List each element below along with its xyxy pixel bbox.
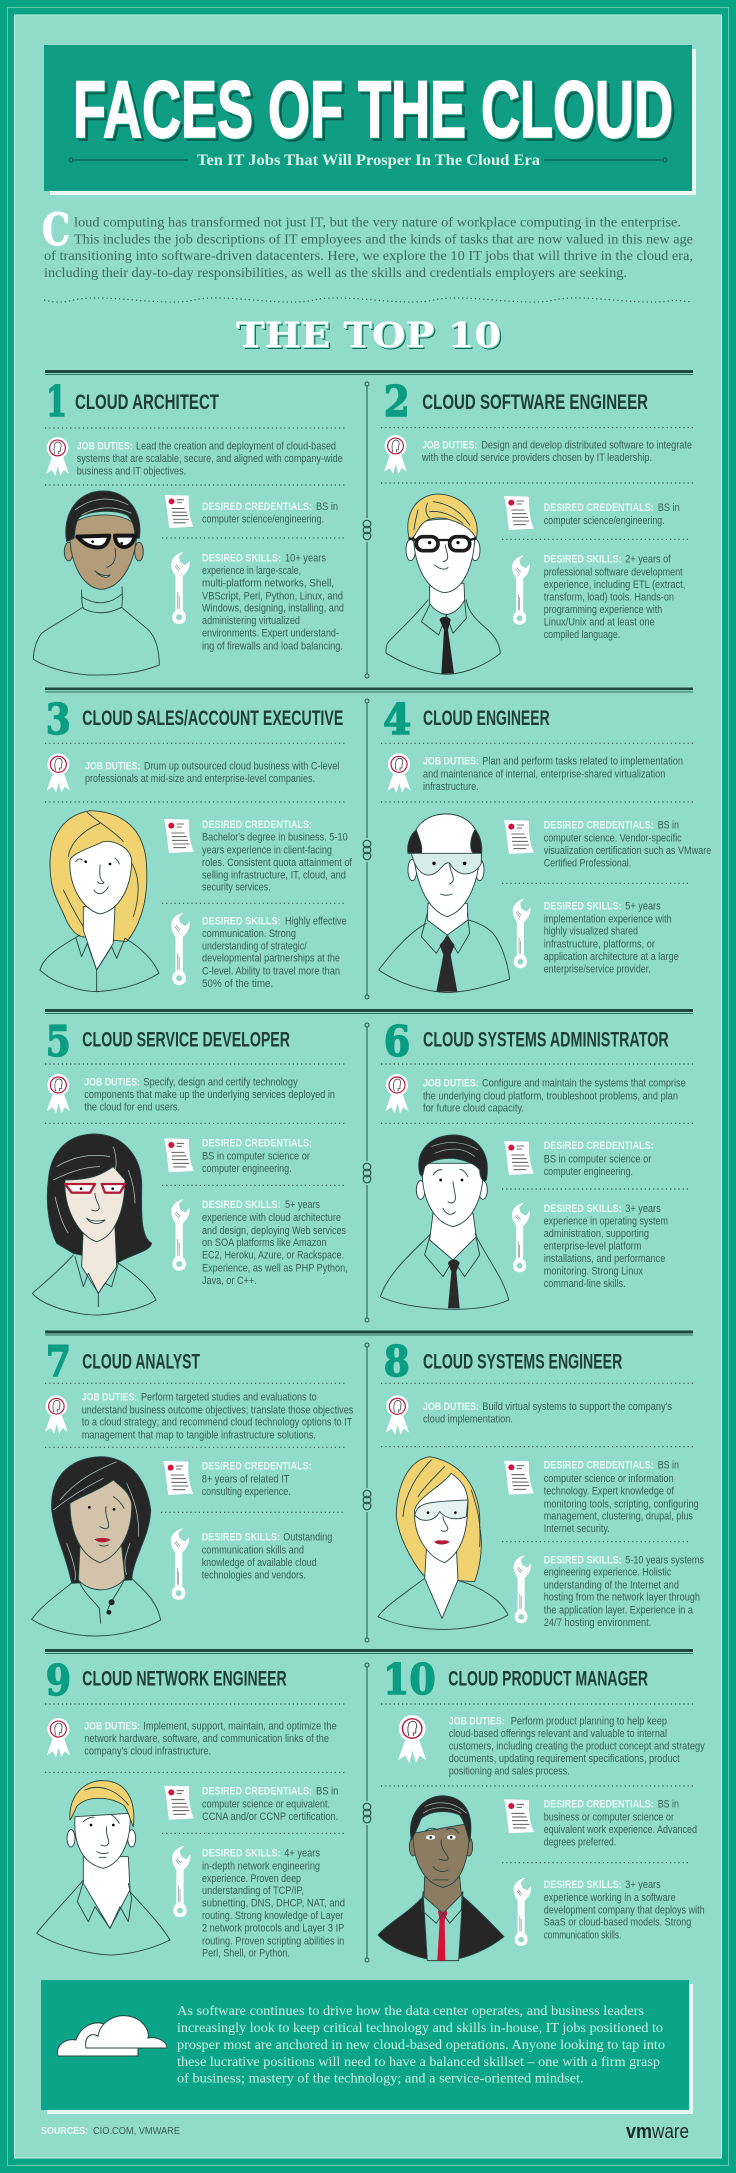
desired skills: [202, 1848, 345, 1960]
panel 1: cloud architect: [33, 377, 347, 675]
job duties: [82, 1392, 353, 1441]
desired credentials: computer science/engineering.: [202, 514, 324, 526]
icon: wrench: [512, 1203, 530, 1272]
icon: wrench: [171, 913, 190, 985]
desired credentials: computer engineering.: [202, 1163, 292, 1175]
desired skills: [202, 915, 347, 990]
desired credentials: BS in computer science or: [202, 1151, 310, 1163]
desired skills: ing of firewalls and load balancing.: [202, 640, 343, 652]
desired skills: development company that deploys with: [544, 1904, 705, 1916]
desired skills: 5+ years: [285, 1199, 320, 1211]
job title: CLOUD SYSTEMS ENGINEER: [423, 1350, 622, 1373]
job duties: Plan and perform tasks related to implementation: [482, 756, 683, 768]
desired skills: enterprise-level platform: [544, 1241, 641, 1253]
desired skills: installations, and performance: [544, 1253, 665, 1265]
portrait: [379, 814, 510, 993]
desired skills: routing. Proven scripting abilities in: [202, 1935, 344, 1947]
desired skills: 5+ years: [625, 901, 661, 913]
desired credentials: DESIRED CREDENTIALS:: [202, 819, 312, 831]
desired credentials: DESIRED CREDENTIALS:: [544, 820, 654, 832]
conclusion text: increasingly look to keep critical technology and skills in-house, IT jobs positioned to: [177, 2021, 663, 2036]
icon: wrench: [172, 1846, 191, 1917]
desired skills: DESIRED SKILLS:: [202, 1532, 280, 1544]
portrait: [386, 494, 500, 674]
desired credentials: Certified Professional.: [544, 858, 631, 870]
conclusion text: these lucrative positions will need to have a balanced skillset – one with a firm grasp: [177, 2055, 660, 2070]
number 7: 7: [46, 1337, 71, 1386]
desired credentials: roles. Consistent quota attainment of: [202, 857, 352, 869]
job duties: infrastructure.: [423, 781, 479, 793]
desired skills: the application layer. Experience in a: [544, 1604, 693, 1616]
job duties: JOB DUTIES:: [423, 1078, 479, 1090]
desired skills: administering virtualized: [202, 615, 300, 627]
icon: credentials document: [504, 496, 534, 530]
desired credentials: visualization certification such as VMware: [544, 845, 711, 857]
icon: ribbon: [384, 435, 407, 474]
job title: CLOUD ANALYST: [82, 1350, 200, 1373]
number 1: 1: [46, 377, 67, 426]
vmware logo: ware: [651, 2121, 689, 2143]
desired credentials: computer science/engineering.: [544, 515, 665, 527]
intro text: [42, 205, 693, 281]
job duties: for future cloud capacity.: [423, 1103, 524, 1115]
conclusion text: of business; mastery of the technology; and a service-oriented mindset.: [177, 2072, 584, 2087]
job title: CLOUD SOFTWARE ENGINEER: [422, 391, 648, 414]
job duties: understand business outcome objectives; translate those objectives: [82, 1404, 353, 1416]
vmware logo: [626, 2121, 689, 2143]
desired skills: programming experience with: [544, 604, 662, 616]
job duties: [84, 1720, 337, 1757]
desired skills: [202, 1199, 348, 1287]
desired skills: [202, 553, 344, 652]
desired skills: Experience, as well as PHP Python,: [202, 1263, 348, 1275]
desired credentials: computer science or information: [544, 1473, 674, 1485]
desired skills: DESIRED SKILLS:: [544, 1203, 622, 1215]
icon: ribbon: [47, 1074, 70, 1113]
sources: [41, 2126, 180, 2137]
number 4: 4: [383, 695, 411, 744]
desired credentials: DESIRED CREDENTIALS:: [544, 1140, 654, 1152]
desired skills: EC2, Heroku, Azure, or Rackspace.: [202, 1250, 344, 1262]
sources: CIO.COM, VMWARE: [93, 2126, 180, 2137]
job duties: documents, updating requirement specifications, product: [449, 1753, 680, 1765]
job duties: [423, 1401, 672, 1426]
desired skills: in-depth network engineering: [202, 1860, 320, 1872]
job duties: [77, 440, 343, 477]
job duties: company's cloud infrastructure.: [84, 1745, 211, 1757]
desired skills: experience, including ETL (extract,: [544, 579, 685, 591]
icon: ribbon: [47, 1718, 70, 1757]
desired credentials: [544, 1460, 699, 1535]
icon: clouds: [57, 2016, 167, 2056]
desired skills: DESIRED SKILLS:: [544, 901, 622, 913]
desired skills: DESIRED SKILLS:: [544, 554, 622, 566]
desired credentials: DESIRED CREDENTIALS:: [544, 1460, 654, 1472]
desired skills: 50% of the time.: [202, 978, 273, 990]
portrait: [32, 1134, 156, 1315]
job duties: Build virtual systems to support the company's: [482, 1401, 672, 1413]
desired skills: developmental partnerships at the: [202, 953, 340, 965]
desired skills: application architecture at a large: [544, 951, 679, 963]
desired credentials: management, clustering, drupal, plus: [544, 1511, 693, 1523]
desired credentials: BS in: [658, 1798, 679, 1810]
icon: credentials document: [164, 1786, 194, 1820]
desired skills: subnetting, DNS, DHCP, NAT, and: [202, 1898, 345, 1910]
job duties: JOB DUTIES:: [423, 1401, 479, 1413]
desired skills: implementation experience with: [544, 913, 672, 925]
desired credentials: consulting experience.: [202, 1486, 291, 1498]
job duties: [421, 440, 692, 464]
portrait: [378, 1457, 508, 1629]
desired credentials: BS in: [658, 502, 680, 514]
desired skills: experience with cloud architecture: [202, 1212, 341, 1224]
job duties: [423, 756, 683, 793]
portrait: [40, 811, 159, 992]
icon: wrench: [513, 899, 531, 968]
job title: CLOUD ENGINEER: [423, 707, 550, 730]
job duties: JOB DUTIES:: [422, 440, 477, 452]
icon: wrench: [514, 1555, 531, 1623]
job duties: JOB DUTIES:: [84, 1720, 140, 1732]
portrait: [380, 1135, 509, 1309]
desired credentials: BS in: [658, 1460, 679, 1472]
desired skills: 3+ years: [625, 1879, 661, 1891]
desired skills: experience in large-scale,: [202, 565, 301, 577]
desired skills: multi-platform networks, Shell,: [202, 578, 334, 590]
icon: credentials document: [504, 1141, 534, 1175]
desired skills: on SOA platforms like Amazon: [202, 1237, 327, 1249]
desired skills: and design, deploying Web services: [202, 1225, 346, 1237]
desired credentials: BS in: [316, 501, 338, 513]
desired skills: 5-10 years systems: [625, 1554, 704, 1566]
desired skills: monitoring. Strong Linux: [544, 1265, 644, 1277]
subtitle: Ten IT Jobs That Will Prosper In The Cloud Era: [197, 152, 540, 169]
desired skills: infrastructure, platforms, or: [544, 938, 655, 950]
job duties: Configure and maintain the systems that comprise: [482, 1078, 686, 1090]
job duties: components that make up the underlying services deployed in: [84, 1089, 335, 1101]
desired credentials: equivalent work experience. Advanced: [544, 1824, 697, 1836]
desired skills: transform, load) tools. Hands-on: [544, 591, 674, 603]
desired skills: communication. Strong: [202, 928, 296, 940]
job duties: Implement, support, maintain, and optimize the: [143, 1720, 337, 1732]
desired skills: engineering experience. Holistic: [544, 1567, 672, 1579]
column dividers: [363, 382, 371, 1962]
desired skills: Outstanding: [283, 1532, 332, 1544]
desired skills: professional software development: [544, 566, 683, 578]
intro text: of transitioning into software-driven datacenters. Here, we explore the 10 IT jobs that will thrive in the cloud era,: [44, 249, 693, 264]
desired skills: Perl, Shell, or Python.: [202, 1948, 290, 1960]
number 6: 6: [384, 1017, 410, 1066]
desired skills: understanding of the Internet and: [544, 1579, 679, 1591]
job duties: cloud implementation.: [423, 1414, 513, 1426]
desired skills: Linux/Unix and at least one: [544, 617, 655, 629]
job duties: JOB DUTIES:: [423, 756, 479, 768]
desired skills: [544, 554, 685, 641]
job duties: JOB DUTIES:: [82, 1392, 137, 1404]
desired skills: 10+ years: [285, 553, 326, 565]
desired credentials: [202, 1460, 312, 1498]
desired credentials: computer science or equivalent.: [202, 1799, 330, 1811]
job duties: positioning and sales process.: [449, 1766, 570, 1778]
desired skills: DESIRED SKILLS:: [544, 1879, 622, 1891]
job duties: [85, 760, 339, 785]
desired credentials: BS in: [658, 820, 679, 832]
desired credentials: [544, 820, 711, 870]
portrait: [37, 1781, 170, 1955]
desired skills: DESIRED SKILLS:: [202, 1848, 281, 1860]
job duties: the cloud for end users.: [84, 1101, 180, 1113]
icon: wrench: [171, 552, 190, 624]
intro text: including their day-to-day responsibilities, as well as the skills and credentials employers are seeking.: [44, 266, 627, 281]
desired credentials: DESIRED CREDENTIALS:: [544, 502, 654, 514]
desired skills: DESIRED SKILLS:: [202, 1199, 281, 1211]
job duties: to a cloud strategy; and recommend cloud technology options to IT: [82, 1417, 353, 1429]
desired skills: experience. Proven deep: [202, 1873, 301, 1885]
desired skills: VBScript, Perl, Python, Linux, and: [202, 590, 343, 602]
job duties: [423, 1078, 686, 1115]
desired credentials: BS in computer science or: [544, 1153, 652, 1165]
icon: ribbon: [398, 1715, 426, 1763]
icon: ribbon: [47, 753, 70, 793]
desired skills: Java, or C++.: [202, 1275, 257, 1287]
desired skills: [544, 1203, 668, 1290]
job duties: Perform targeted studies and evaluations to: [141, 1392, 317, 1404]
panel 7: cloud analyst: [32, 1337, 353, 1636]
title banner: [44, 45, 696, 195]
desired credentials: [202, 1786, 338, 1823]
desired credentials: [202, 1137, 312, 1175]
icon: ribbon: [385, 1074, 409, 1113]
desired credentials: Bachelor's degree in business. 5-10: [202, 832, 348, 844]
job duties: JOB DUTIES:: [85, 760, 140, 772]
desired credentials: [544, 1140, 654, 1178]
job duties: [449, 1716, 705, 1778]
desired credentials: computer science. Vendor-specific: [544, 832, 682, 844]
icon: credentials document: [163, 1461, 193, 1495]
desired skills: communication skills and: [202, 1544, 304, 1556]
desired skills: [544, 901, 679, 975]
desired credentials: [202, 819, 352, 894]
vmware logo: vm: [626, 2121, 652, 2143]
desired skills: routing. Strong knowledge of Layer: [202, 1910, 344, 1922]
desired skills: [544, 1554, 704, 1629]
icon: ribbon: [45, 1396, 68, 1434]
job duties: with the cloud service providers chosen by IT leadership.: [421, 452, 652, 464]
desired skills: 24/7 hosting environment.: [544, 1617, 651, 1629]
panel 9: cloud network engineer: [37, 1656, 347, 1960]
icon: ribbon: [386, 1395, 409, 1435]
number 2: 2: [384, 377, 410, 426]
desired skills: compiled language.: [544, 629, 620, 641]
icon: credentials document: [504, 1799, 534, 1833]
desired skills: technologies and vendors.: [202, 1569, 306, 1581]
job duties: business and IT objectives.: [77, 465, 186, 477]
icon: credentials document: [164, 1138, 194, 1172]
number 5: 5: [46, 1017, 71, 1066]
desired skills: understanding of TCP/IP,: [202, 1885, 304, 1897]
icon: wrench: [512, 555, 530, 625]
desired skills: knowledge of available cloud: [202, 1557, 317, 1569]
conclusion text: prosper most are anchored in new cloud-based operations. Anyone looking to tap into: [177, 2038, 665, 2053]
number 8: 8: [384, 1337, 410, 1386]
job duties: JOB DUTIES:: [77, 440, 133, 452]
desired skills: [202, 1532, 332, 1581]
job duties: Design and develop distributed software to integrate: [481, 440, 692, 452]
desired skills: enterprise/service provider.: [544, 963, 651, 975]
job duties: [84, 1076, 335, 1113]
icon: wrench: [171, 1199, 190, 1271]
desired skills: 2+ years of: [625, 554, 671, 566]
portrait: [378, 1796, 504, 1961]
intro text: This includes the job descriptions of IT employees and the kinds of tasks that are now valued in this new age: [74, 232, 693, 247]
icon: wrench: [514, 1878, 531, 1946]
panel 10: cloud product manager: [378, 1655, 705, 1961]
job duties: JOB DUTIES:: [84, 1076, 140, 1088]
desired credentials: security services.: [202, 882, 271, 894]
icon: credentials document: [504, 820, 534, 854]
desired credentials: degrees preferred.: [544, 1837, 616, 1849]
desired skills: [544, 1879, 705, 1941]
desired credentials: years experience in client-facing: [202, 844, 332, 856]
desired credentials: computer engineering.: [544, 1166, 633, 1178]
desired credentials: technology. Expert knowledge of: [544, 1486, 674, 1498]
job duties: the underlying cloud platform, troubleshoot problems, and plan: [423, 1090, 678, 1102]
job duties: Specify, design and certify technology: [143, 1076, 298, 1088]
job duties: network hardware, software, and communication links of the: [84, 1733, 329, 1745]
desired skills: C-level. Ability to travel more than: [202, 965, 340, 977]
desired credentials: DESIRED CREDENTIALS:: [202, 1786, 312, 1798]
desired credentials: selling infrastructure, IT, cloud, and: [202, 869, 346, 881]
desired skills: Highly effective: [285, 915, 347, 927]
job duties: systems that are scalable, secure, and aligned with company-wide: [77, 453, 343, 465]
panel 2: cloud software engineer: [381, 377, 693, 674]
desired skills: DESIRED SKILLS:: [202, 553, 281, 565]
job duties: JOB DUTIES:: [449, 1716, 505, 1728]
portrait: [32, 1457, 161, 1636]
desired skills: understanding of strategic/: [202, 940, 307, 952]
icon: ribbon: [387, 753, 411, 793]
desired skills: 4+ years: [284, 1848, 320, 1860]
icon: credentials document: [164, 819, 194, 853]
desired skills: DESIRED SKILLS:: [544, 1554, 622, 1566]
desired credentials: 8+ years of related IT: [202, 1474, 290, 1486]
number 3: 3: [46, 695, 71, 744]
desired skills: experience working in a software: [544, 1892, 676, 1904]
job duties: cloud-based offerings relevant and valuable to internal: [449, 1728, 667, 1740]
portrait: [33, 491, 159, 675]
job duties: and maintenance of internal, enterprise-shared virtualization: [423, 768, 665, 780]
number 10: 10: [383, 1655, 436, 1704]
desired credentials: business or computer science or: [544, 1811, 674, 1823]
desired skills: experience in operating system: [544, 1216, 668, 1228]
desired skills: administration, supporting: [544, 1228, 649, 1240]
job title: CLOUD ARCHITECT: [75, 391, 219, 414]
desired credentials: DESIRED CREDENTIALS:: [544, 1798, 654, 1810]
desired credentials: BS in: [316, 1786, 338, 1798]
conclusion text: As software continues to drive how the data center operates, and business leaders: [177, 2004, 644, 2019]
job duties: customers, including creating the product concept and strategy: [449, 1741, 705, 1753]
job duties: management that map to tangible infrastructure solutions.: [82, 1429, 316, 1441]
section rules: [45, 370, 693, 1654]
desired credentials: monitoring tools, scripting, configuring: [544, 1498, 699, 1510]
drop cap: C: [42, 205, 70, 256]
icon: ribbon: [46, 437, 69, 476]
panel 8: cloud systems engineer: [378, 1337, 704, 1629]
icon: credentials document: [504, 1461, 534, 1495]
desired credentials: DESIRED CREDENTIALS:: [202, 501, 312, 513]
desired skills: command-line skills.: [544, 1278, 626, 1290]
desired skills: hosting from the network layer through: [544, 1592, 700, 1604]
desired credentials: [202, 501, 338, 526]
conclusion text: [177, 2004, 665, 2087]
job duties: Perform product planning to help keep: [511, 1716, 667, 1728]
icon: wrench: [171, 1528, 189, 1600]
job duties: Lead the creation and deployment of cloud-based: [136, 440, 336, 452]
job title: CLOUD SERVICE DEVELOPER: [82, 1029, 290, 1052]
desired skills: 3+ years: [625, 1203, 661, 1215]
desired credentials: [544, 1798, 697, 1849]
desired credentials: DESIRED CREDENTIALS:: [202, 1137, 312, 1149]
icon: credentials document: [164, 495, 194, 528]
desired credentials: Internet security.: [544, 1523, 610, 1535]
number 9: 9: [46, 1656, 71, 1705]
heading: the top 10: THE TOP 10: [236, 315, 501, 356]
sources: SOURCES:: [41, 2126, 88, 2137]
job title: CLOUD SALES/ACCOUNT EXECUTIVE: [82, 707, 343, 730]
desired skills: highly visualized shared: [544, 926, 638, 938]
panel 4: cloud engineer: [379, 695, 711, 993]
job title: CLOUD NETWORK ENGINEER: [82, 1668, 287, 1691]
desired skills: communication skills.: [544, 1929, 621, 1941]
desired credentials: CCNA and/or CCNP certification.: [202, 1811, 338, 1823]
panel 5: cloud service developer: [32, 1017, 348, 1315]
panel 6: cloud systems administrator: [380, 1017, 693, 1309]
conclusion box: [41, 1980, 693, 2114]
desired credentials: [544, 502, 680, 527]
job duties: Drum up outsourced cloud business with C-level: [144, 760, 339, 772]
panel 3: cloud sales/account executive: [40, 695, 352, 992]
desired skills: 2 network protocols and Layer 3 IP: [202, 1923, 344, 1935]
desired skills: SaaS or cloud-based models. Strong: [544, 1917, 691, 1929]
desired skills: DESIRED SKILLS:: [202, 915, 281, 927]
desired skills: Windows, designing, installing, and: [202, 603, 344, 615]
intro text: loud computing has transformed not just IT, but the very nature of workplace computing in the enterprise.: [74, 216, 681, 231]
desired credentials: DESIRED CREDENTIALS:: [202, 1460, 312, 1472]
desired skills: environments. Expert understand-: [202, 628, 339, 640]
job duties: professionals at mid-size and enterprise-level companies.: [85, 773, 315, 785]
